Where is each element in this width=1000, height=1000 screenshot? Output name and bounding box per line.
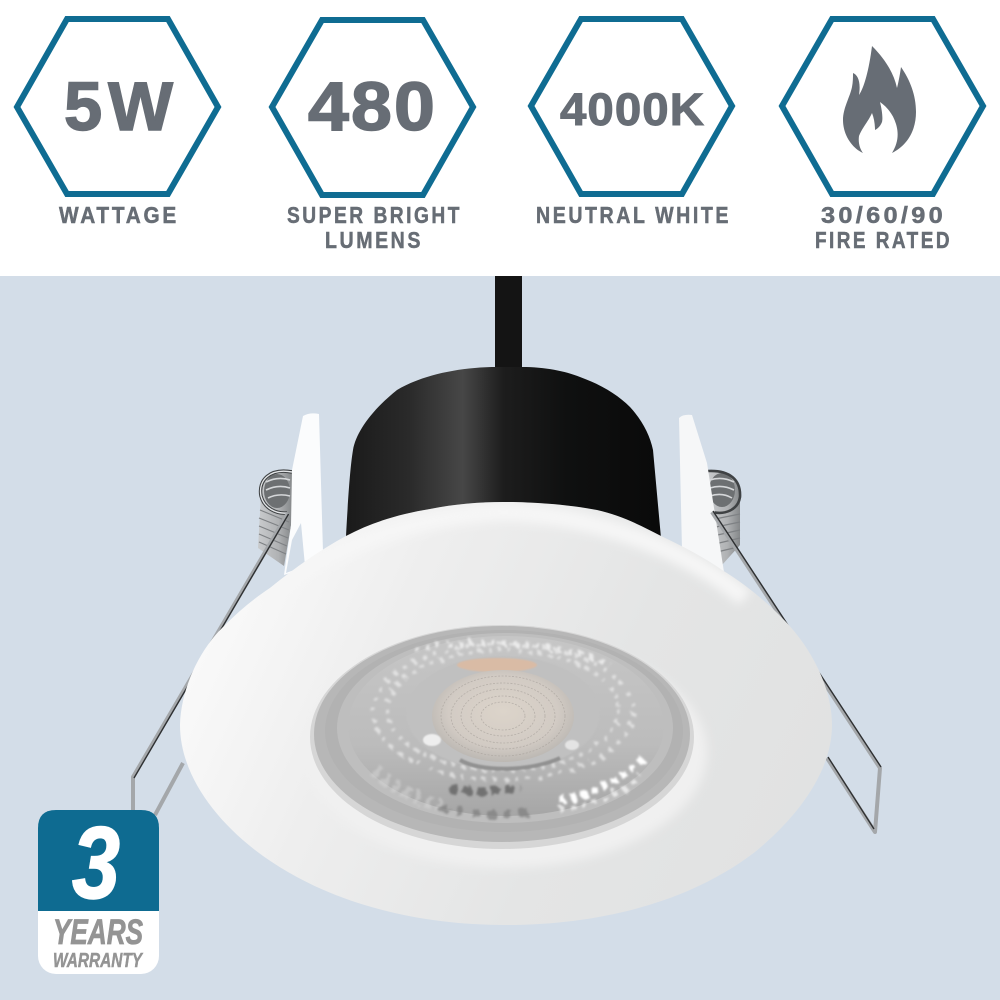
right clip tab — [679, 415, 724, 572]
warm LED glow — [457, 658, 537, 672]
cable — [495, 276, 522, 372]
well highlights and shadow — [423, 734, 579, 769]
spec: lumens — [272, 20, 473, 253]
label: super bright lumens — [287, 202, 462, 253]
lens outer ring — [310, 625, 694, 849]
left clip notch — [286, 523, 305, 573]
left spring — [258, 470, 292, 566]
label: super bright lumens: LUMENS — [325, 227, 423, 253]
lens — [310, 625, 694, 849]
badge years: YEARS — [53, 913, 143, 952]
badge white base — [38, 810, 159, 974]
badge warranty: WARRANTY — [53, 950, 143, 972]
right wire — [712, 511, 881, 832]
inner well — [406, 656, 600, 770]
hexagon: fire rating — [782, 19, 983, 194]
background panel: top white band — [0, 0, 1000, 276]
badge blue top — [38, 810, 159, 911]
hexagon: colour temperature — [531, 19, 732, 194]
label: 30/60/90 fire rated: 30/60/90 — [821, 202, 946, 228]
reflector — [348, 636, 664, 816]
product: downlight — [133, 276, 881, 925]
label: super bright lumens: SUPER BRIGHT — [287, 202, 462, 228]
bezel shading — [346, 502, 748, 866]
bezel — [180, 502, 832, 925]
icon: flame — [843, 46, 916, 153]
badge number: 3 — [72, 806, 120, 920]
background panel: blue-grey product area — [0, 276, 1000, 1000]
label: 30/60/90 fire rated: FIRE RATED — [815, 227, 952, 253]
left clip tab — [284, 413, 323, 575]
central dome lens — [432, 670, 574, 762]
spec: colour temperature — [531, 19, 732, 228]
driver housing — [346, 367, 661, 545]
label: 30/60/90 fire rated — [815, 202, 952, 253]
label: neutral white: NEUTRAL WHITE — [536, 202, 731, 228]
hexagon: wattage — [17, 19, 218, 194]
spec: wattage — [17, 19, 218, 228]
reflector facet highlights — [373, 643, 645, 814]
right spring — [708, 470, 740, 565]
value: 5W: 5W — [64, 68, 179, 145]
spec: fire rating — [782, 19, 983, 253]
label: wattage: WATTAGE — [59, 202, 179, 228]
value: 4000K: 4000K — [560, 84, 705, 135]
badge: 3 years warranty — [38, 806, 159, 974]
hexagon: lumens — [272, 20, 473, 195]
left wire — [133, 513, 289, 815]
value: 480: 480 — [308, 68, 437, 145]
